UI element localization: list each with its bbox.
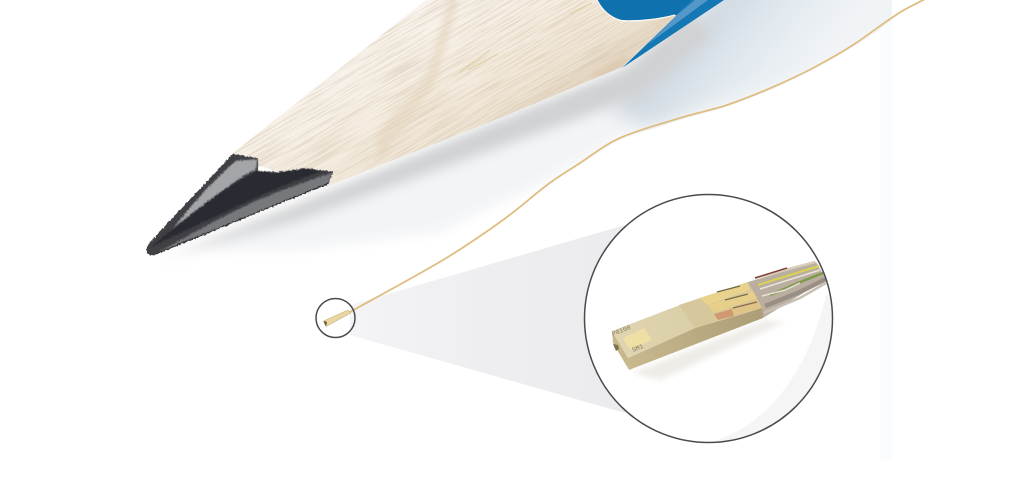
wood yellow streaks	[460, 3, 592, 72]
gold contact pads	[700, 283, 762, 320]
pencil	[146, 0, 724, 256]
chip step top	[679, 282, 762, 328]
lens ring	[584, 194, 832, 442]
chip body top face	[612, 305, 695, 358]
chip notch	[613, 344, 619, 351]
chip body front face	[628, 308, 763, 370]
pencil lead	[147, 154, 333, 255]
pencil wood	[228, 0, 676, 186]
pencil sliver highlight	[648, 0, 708, 44]
lead lower facet	[155, 173, 333, 254]
chip body end face	[612, 331, 629, 370]
wood tan ring	[375, 0, 460, 160]
magnification cone	[350, 225, 625, 413]
pencil white lacquer edge	[597, 0, 675, 21]
lead silhouette	[147, 154, 333, 255]
faint panel edge	[880, 20, 892, 460]
lead dark band	[150, 168, 322, 247]
wires bundle	[748, 262, 826, 318]
pencil blue lacquer	[597, 0, 693, 20]
chip marking: P0108	[611, 324, 632, 338]
small sensor at wire tip	[324, 310, 351, 326]
pencil blue sliver edge	[622, 0, 724, 68]
gold wire	[350, 0, 925, 312]
chip label pad	[623, 328, 652, 350]
lens crescent shading	[714, 295, 832, 442]
magnified sensor chip	[611, 262, 826, 380]
illustration: pencil, wire and magnified sensor	[146, 0, 925, 444]
chip shadow	[632, 320, 785, 380]
small magnifier ring	[316, 298, 355, 338]
pencil cast shadow and background tint	[165, 0, 920, 258]
lead upper facet	[172, 159, 257, 231]
chip marking 2: SM1	[631, 343, 645, 354]
lead bottom edge	[153, 183, 328, 255]
big magnifier lens	[584, 194, 836, 445]
